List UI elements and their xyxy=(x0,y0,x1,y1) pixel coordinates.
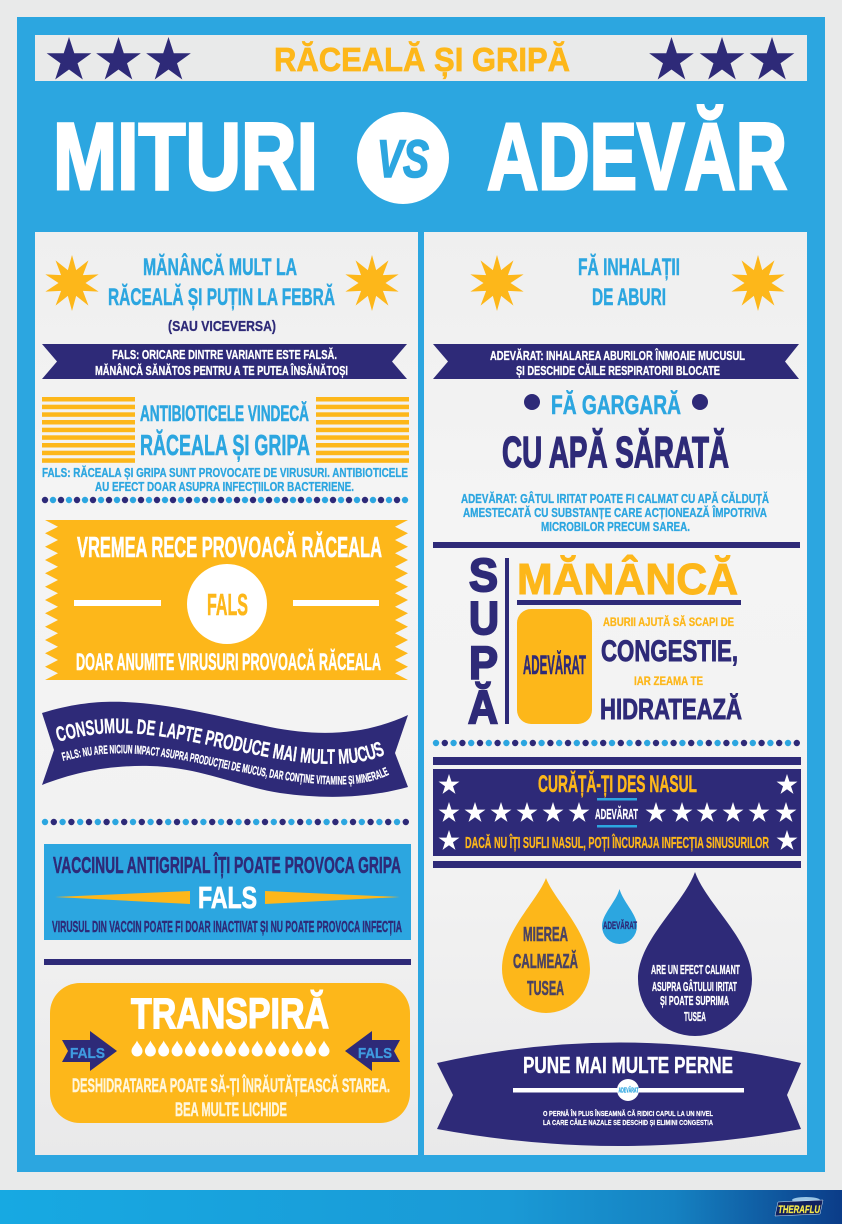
ribbon: inhale true: ȘI DESCHIDE CĂILE RESPIRATORII BLOCATE xyxy=(516,363,720,378)
arrow: fals left xyxy=(62,1031,117,1071)
drop: true xyxy=(602,889,637,944)
ticket: cold weather: FALS xyxy=(207,587,248,622)
text: gargle true: MICROBILOR PRECUM SAREA. xyxy=(541,519,690,534)
text: antibiotics false: AU EFECT DOAR ASUPRA INFECȚIILOR BACTERIENE. xyxy=(95,479,354,494)
vertical word supa: U xyxy=(469,592,499,644)
ribbon: inhale true xyxy=(433,344,799,379)
box: sweat xyxy=(50,983,410,1123)
stripes left xyxy=(42,397,135,463)
block: soup: CONGESTIE, xyxy=(601,635,738,668)
ribbon: false eating xyxy=(42,344,407,379)
vs badge: VS xyxy=(377,130,429,189)
stripes right xyxy=(316,397,409,463)
arrow: fals right: FALS xyxy=(358,1045,392,1062)
dots divider xyxy=(45,819,408,825)
heading: eat a lot: RĂCEALĂ ȘI PUȚIN LA FEBRĂ xyxy=(108,283,335,311)
drop: true: ADEVĂRAT xyxy=(603,919,637,932)
banner: pillows: ADEVĂRAT xyxy=(618,1086,639,1094)
heading: inhale xyxy=(578,253,680,311)
box: blow nose xyxy=(433,757,801,868)
box: vaccine: VACCINUL ANTIGRIPAL ÎȚI POATE PROVOCA GRIPA xyxy=(53,851,401,878)
box: vaccine: VIRUSUL DIN VACCIN POATE FI DOAR INACTIVAT ȘI NU POATE PROVOCA INFECȚIA xyxy=(52,919,402,936)
icon: left stars xyxy=(47,37,191,80)
header strip xyxy=(35,35,807,81)
logo: theraflu xyxy=(775,1197,823,1216)
heading: inhale: DE ABURI xyxy=(592,284,666,311)
heading: antibiotics: ANTIBIOTICELE VINDECĂ xyxy=(140,401,309,426)
dots divider xyxy=(45,497,407,503)
drop: honey: MIEREA xyxy=(523,924,568,946)
icon: water drops row xyxy=(132,1040,330,1056)
wave banner: milk: FALS: NU ARE NICIUN IMPACT ASUPRA PRODUCȚIEI DE MUCUS, DAR CONȚINE VITAMINE ȘI MINERALE xyxy=(61,744,390,787)
banner: pillows xyxy=(437,1042,801,1146)
box: blow nose: CURĂȚĂ-ȚI DES NASUL xyxy=(538,770,697,798)
block: soup: ABURII AJUTĂ SĂ SCAPI DE xyxy=(603,614,734,629)
ribbon: inhale true: ADEVĂRAT: INHALAREA ABURILOR ÎNMOAIE MUCUSUL xyxy=(490,348,745,363)
icon: white stars xyxy=(439,774,797,850)
text: antibiotics false: FALS: RĂCEALA ȘI GRIPA SUNT PROVOCATE DE VIRUSURI. ANTIBIOTICELE xyxy=(42,465,408,480)
block: soup xyxy=(468,549,742,733)
icon: sun left xyxy=(45,255,99,311)
icon: right stars xyxy=(649,37,794,80)
title: mituri: MITURI xyxy=(53,104,318,210)
vertical word supa: P xyxy=(469,637,498,689)
heading: antibiotics: RĂCEALA ȘI GRIPA xyxy=(140,429,310,462)
drop: honey: CALMEAZĂ xyxy=(513,950,578,973)
drop: calming effect: ȘI POATE SUPRIMA xyxy=(660,994,729,1008)
heading: eat a lot: MĂNÂNCĂ MULT LA xyxy=(143,253,297,281)
logo: theraflu: THERAFLU xyxy=(778,1204,821,1216)
dots divider xyxy=(436,740,798,746)
icon: sun left xyxy=(470,255,524,311)
block: soup: MĂNÂNCĂ xyxy=(517,554,738,604)
wave banner: milk: CONSUMUL DE LAPTE PRODUCE MAI MULT MUCUS xyxy=(56,718,384,764)
heading: inhale: FĂ INHALAȚII xyxy=(578,253,680,281)
text: antibiotics false xyxy=(42,465,408,494)
banner: pillows: O PERNĂ ÎN PLUS ÎNSEAMNĂ CĂ RIDICI CAPUL LA UN NIVEL xyxy=(543,1109,713,1118)
icon: sun right xyxy=(345,255,399,311)
block: soup: IAR ZEAMA TE xyxy=(634,674,703,688)
box: blow nose: ADEVĂRAT xyxy=(595,806,638,823)
heading: gargle: FĂ GARGARĂ xyxy=(551,389,681,420)
subheading: (SAU VICEVERSA) xyxy=(168,318,276,335)
heading: antibiotics xyxy=(140,401,310,462)
block: soup: ADEVĂRAT xyxy=(523,649,586,680)
box: sweat: DESHIDRATAREA POATE SĂ-ȚI ÎNRĂUTĂȚEASCĂ STAREA. xyxy=(72,1075,390,1097)
ticket: cold weather: DOAR ANUMITE VIRUSURI PROVOACĂ RĂCEALA xyxy=(76,648,381,676)
icon: sun right xyxy=(731,255,785,311)
banner: pillows: PUNE MAI MULTE PERNE xyxy=(523,1052,733,1078)
block: soup: HIDRATEAZĂ xyxy=(600,693,742,726)
ribbon: false eating: MĂNÂNCĂ SĂNĂTOS PENTRU A TE PUTEA ÎNSĂNĂTOȘI xyxy=(95,363,348,378)
drop: calming effect: ASUPRA GÂTULUI IRITAT xyxy=(652,979,737,994)
box: vaccine xyxy=(44,844,411,940)
vs badge xyxy=(357,112,449,204)
panel: mituri xyxy=(35,232,418,1155)
footer bar xyxy=(0,1190,842,1224)
panel: adevar xyxy=(424,232,807,1155)
box: sweat: BEA MULTE LICHIDE xyxy=(175,1100,287,1121)
arrow: fals left: FALS xyxy=(70,1045,105,1062)
drop: calming effect xyxy=(638,872,752,1036)
supertitle: RĂCEALĂ ȘI GRIPĂ xyxy=(274,41,570,79)
drop: calming effect: TUSEA xyxy=(684,1010,706,1024)
drop: calming effect: ARE UN EFECT CALMANT xyxy=(651,963,740,977)
vertical word supa: Ă xyxy=(468,681,498,733)
vertical word supa xyxy=(468,549,499,733)
text: gargle true xyxy=(461,491,769,534)
ribbon: false eating: FALS: ORICARE DINTRE VARIANTE ESTE FALSĂ. xyxy=(112,347,337,362)
heading: eat a lot xyxy=(108,253,335,311)
drop: honey: TUSEA xyxy=(527,978,564,1000)
box: vaccine: FALS xyxy=(198,880,257,915)
ticket: cold weather: VREMEA RECE PROVOACĂ RĂCEALA xyxy=(77,531,382,564)
ticket: cold weather xyxy=(45,520,408,680)
wave banner: milk xyxy=(42,702,408,797)
drop: honey xyxy=(502,878,590,1013)
arrow: fals right xyxy=(345,1031,400,1071)
box: sweat: TRANSPIRĂ xyxy=(131,990,329,1038)
vertical word supa: S xyxy=(469,549,498,601)
banner: pillows: LA CARE CĂILE NAZALE SE DESCHID ȘI ELIMINI CONGESTIA xyxy=(543,1118,713,1127)
